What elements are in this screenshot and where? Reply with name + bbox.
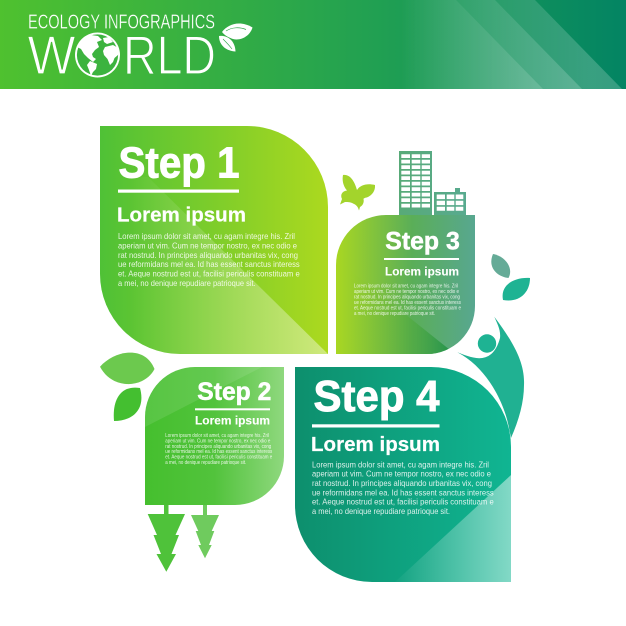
body text: step 2 bbox=[165, 433, 273, 466]
heading: step 1: Step 1 bbox=[118, 138, 240, 188]
logo word RLD: RLD bbox=[123, 24, 216, 86]
body text: step 4: aperiam ut vim. Cum ne tempor nostro, ex nec odio e bbox=[312, 469, 491, 479]
body text: step 2: rat nostrud. In principes aliquando urbanitas vix, cong bbox=[165, 444, 271, 450]
heading: step 4: Step 4 bbox=[314, 372, 440, 421]
icon: city buildings bbox=[399, 151, 466, 217]
underline: step 4 bbox=[312, 424, 440, 428]
header banner bbox=[0, 0, 626, 89]
body text: step 4: rat nostrud. In principes aliquando urbanitas vix, cong bbox=[312, 478, 492, 488]
body text: step 2: aperiam ut vim. Cum ne tempor nostro, ex nec odio e bbox=[165, 438, 270, 444]
body text: step 3 bbox=[354, 284, 461, 317]
panel: step 1 bbox=[100, 126, 328, 354]
icon: right leaf bbox=[503, 278, 530, 300]
panel: step 4 bbox=[295, 367, 511, 582]
icon: butterfly bbox=[340, 175, 375, 210]
icon: upper leaf bbox=[491, 254, 510, 278]
panel: step 3 bbox=[336, 215, 475, 354]
subheading: step 1: Lorem ipsum bbox=[117, 204, 246, 226]
subheading: step 4: Lorem ipsum bbox=[311, 434, 440, 456]
body text: step 3: et. Aeque nostrud est ut, facilisi periculis constituam e bbox=[354, 306, 461, 312]
icon: left leaf top bbox=[100, 353, 154, 384]
body text: step 1: Lorem ipsum dolor sit amet, cu agam integre his. Zril bbox=[118, 231, 295, 241]
body text: step 1: a mei, no denique repudiare patrioque sit. bbox=[118, 278, 256, 288]
body text: step 3: aperiam ut vim. Cum ne tempor nostro, ex nec odio e bbox=[354, 289, 459, 295]
heading: step 3: Step 3 bbox=[385, 227, 460, 255]
body text: step 1: aperiam ut vim. Cum ne tempor nostro, ex nec odio e bbox=[118, 240, 297, 250]
underline: step 3 bbox=[384, 258, 459, 260]
body text: step 4 bbox=[312, 459, 494, 516]
header logo bbox=[28, 12, 252, 86]
logo word W: W bbox=[28, 24, 76, 86]
body text: step 1: rat nostrud. In principes aliquando urbanitas vix, cong bbox=[118, 250, 298, 260]
body text: step 4: a mei, no denique repudiare patrioque sit. bbox=[312, 506, 450, 516]
icon: globe bbox=[75, 32, 120, 78]
heading: step 2: Step 2 bbox=[197, 378, 271, 406]
body text: step 2: ue reformidans mel ea. Id has essent sanctus interess bbox=[165, 449, 273, 455]
body text: step 1 bbox=[118, 231, 300, 288]
body text: step 3: ue reformidans mel ea. Id has essent sanctus interess bbox=[354, 300, 461, 306]
body text: step 4: ue reformidans mel ea. Id has essent sanctus interess bbox=[312, 487, 494, 497]
body text: step 2: Lorem ipsum dolor sit amet, cu agam integre his. Zril bbox=[165, 433, 269, 439]
body text: step 1: et. Aeque nostrud est ut, facilisi periculis constituam e bbox=[118, 269, 300, 279]
icon: person with raised arms bbox=[457, 317, 524, 438]
person body bbox=[457, 317, 524, 438]
underline: step 2 bbox=[195, 408, 270, 410]
person head bbox=[478, 334, 496, 353]
body text: step 3: a mei, no denique repudiare patrioque sit. bbox=[354, 311, 435, 317]
body text: step 4: et. Aeque nostrud est ut, facilisi periculis constituam e bbox=[312, 497, 494, 507]
body text: step 3: rat nostrud. In principes aliquando urbanitas vix, cong bbox=[354, 295, 460, 301]
icon: large tree arrow bbox=[148, 504, 185, 572]
logo subtitle: ECOLOGY INFOGRAPHICS bbox=[28, 12, 215, 34]
short building bbox=[434, 188, 466, 217]
body text: step 4: Lorem ipsum dolor sit amet, cu agam integre his. Zril bbox=[312, 459, 489, 469]
subheading: step 2: Lorem ipsum bbox=[195, 414, 270, 428]
panel: step 2 bbox=[145, 367, 284, 505]
body text: step 1: ue reformidans mel ea. Id has essent sanctus interess bbox=[118, 259, 300, 269]
body text: step 3: Lorem ipsum dolor sit amet, cu agam integre his. Zril bbox=[354, 284, 458, 290]
icon: header leaves bbox=[219, 24, 252, 52]
subheading: step 3: Lorem ipsum bbox=[385, 266, 459, 278]
icon: small tree arrow bbox=[191, 504, 219, 558]
icon: left leaf bottom bbox=[114, 388, 141, 421]
underline: step 1 bbox=[118, 190, 239, 193]
tall building bbox=[399, 151, 432, 217]
body text: step 2: a mei, no denique repudiare patrioque sit. bbox=[165, 460, 246, 466]
body text: step 2: et. Aeque nostrud est ut, facilisi periculis constituam e bbox=[165, 455, 272, 461]
